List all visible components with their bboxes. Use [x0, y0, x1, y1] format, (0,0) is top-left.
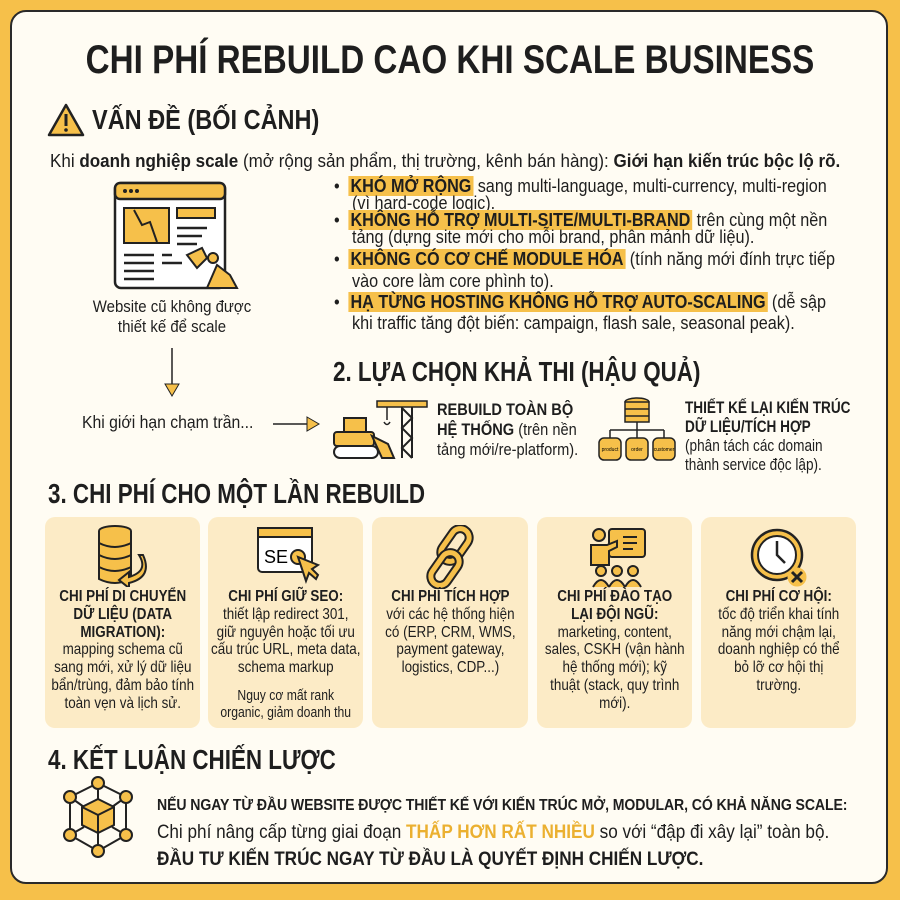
icon: warning: [48, 104, 84, 136]
bullet 4: [334, 291, 826, 333]
card: opportunity: CHI PHÍ CƠ HỘI:: [725, 588, 832, 605]
card: training: [537, 517, 692, 728]
card: data migration: toàn vẹn và lịch sử.: [64, 695, 181, 712]
option 2 text: THIẾT KẾ LẠI KIẾN TRÚC: [685, 398, 850, 417]
heading: section 4: 4. KẾT LUẬN CHIẾN LƯỢC: [48, 744, 336, 775]
heading: section 3: 3. CHI PHÍ CHO MỘT LẦN REBUILD: [48, 478, 425, 509]
option 2 text: thành service độc lập).: [685, 455, 822, 474]
conclusion text: ĐẦU TƯ KIẾN TRÚC NGAY TỪ ĐẦU LÀ QUYẾT ĐỊNH CHIẾN LƯỢC.: [157, 848, 703, 870]
icon: broken website: [114, 182, 239, 290]
caption: website: Website cũ không được: [93, 297, 251, 316]
caption: website: [92, 297, 251, 336]
icon: clock with x: [750, 528, 806, 586]
card: SEO: [208, 517, 363, 728]
option 2 text: (phân tách các domain: [685, 436, 823, 455]
heading: van de: VẤN ĐỀ (BỐI CẢNH): [92, 104, 319, 135]
card: data migration: sang mới, xử lý dữ liệu: [54, 659, 191, 676]
option 2 text: [685, 398, 850, 474]
arrow down: [164, 348, 180, 397]
card: training: LẠI ĐỘI NGŨ:: [571, 606, 658, 623]
arrow right: [273, 416, 320, 432]
card: data migration: mapping schema cũ: [62, 641, 183, 658]
conclusion text: Chi phí nâng cấp từng giai đoạn THẤP HƠN RẤT NHIỀU so với “đập đi xây lại” toàn bộ.: [157, 821, 829, 843]
icon: presenter: [590, 528, 646, 588]
icon: database split: order: [631, 447, 643, 453]
card: SEO: cấu trúc URL, meta data,: [211, 641, 360, 658]
card: training: CHI PHÍ ĐÀO TẠO: [557, 588, 672, 605]
card: integration: CHI PHÍ TÍCH HỢP: [391, 588, 509, 605]
option 1 text: HỆ THỐNG (trên nền: [437, 420, 577, 439]
bullet list: [334, 175, 835, 333]
icon: database split: [598, 397, 676, 461]
card: SEO: giữ nguyên hoặc tối ưu: [216, 624, 355, 641]
card: integration: payment gateway,: [396, 641, 504, 658]
card: data migration: DỮ LIỆU (DATA: [73, 606, 172, 623]
card: SEO: thiết lập redirect 301,: [223, 606, 348, 623]
caption: website: thiết kế để scale: [118, 317, 226, 336]
option 1 text: REBUILD TOÀN BỘ: [437, 400, 573, 419]
option 2 text: DỮ LIỆU/TÍCH HỢP: [685, 417, 811, 436]
bullet 4: • HẠ TỪNG HOSTING KHÔNG HỖ TRỢ AUTO-SCALING (dễ sập: [334, 292, 826, 312]
conclusion text: [157, 796, 847, 870]
icon: bulldozer and crane: [333, 400, 428, 459]
option 1 text: tảng mới/re-platform).: [437, 440, 578, 459]
bullet 1: (vì hard-code logic).: [352, 193, 495, 213]
card: opportunity: [701, 517, 856, 728]
intro text: Khi doanh nghiệp scale (mở rộng sản phẩm, thị trường, kênh bán hàng): Giới hạn kiến trúc bộc lộ rõ.: [50, 150, 840, 171]
card: opportunity: doanh nghiệp có thể: [718, 641, 839, 658]
card: integration: [372, 517, 528, 728]
card: data migration: CHI PHÍ DI CHUYỂN: [59, 588, 186, 605]
text: limit reached: Khi giới hạn chạm trần...: [82, 412, 253, 432]
card: data migration: [45, 517, 200, 728]
icon: database migrate: [98, 525, 147, 587]
card: opportunity: bỏ lỡ cơ hội thị: [734, 659, 823, 676]
card: opportunity: tốc độ triển khai tính: [718, 606, 839, 623]
card: training: sales, CSKH (vận hành: [545, 641, 684, 658]
card: SEO: organic, giảm doanh thu: [220, 705, 351, 721]
card: training: hệ thống mới); kỹ: [562, 659, 667, 676]
card: opportunity: năng mới chậm lại,: [721, 624, 836, 641]
bullet 2: • KHÔNG HỖ TRỢ MULTI-SITE/MULTI-BRAND trên cùng một nền: [334, 210, 827, 230]
icon: chain link: [426, 525, 474, 589]
card: training: thuật (stack, quy trình: [550, 677, 679, 694]
card: SEO: CHI PHÍ GIỮ SEO:: [228, 588, 343, 605]
card: opportunity: trường.: [756, 677, 801, 694]
icon: database split: product: [602, 447, 619, 453]
card: SEO: Nguy cơ mất rank: [237, 688, 334, 704]
card: SEO: schema markup: [238, 659, 333, 676]
bullet 1: [334, 175, 827, 213]
title: CHI PHÍ REBUILD CAO KHI SCALE BUSINESS: [86, 38, 814, 82]
card: data migration: MIGRATION):: [80, 624, 165, 641]
bullet 2: tảng (dựng site mới cho mỗi brand, phân mảnh dữ liệu).: [352, 227, 754, 247]
option 1 text: [437, 400, 578, 459]
card: integration: logistics, CDP...): [401, 659, 499, 676]
icon: modular cube: [63, 776, 133, 858]
bullet 4: khi traffic tăng đột biến: campaign, flash sale, seasonal peak).: [352, 313, 795, 333]
card: integration: có (ERP, CRM, WMS,: [385, 624, 515, 641]
bullet 3: • KHÔNG CÓ CƠ CHẾ MODULE HÓA (tính năng mới đính trực tiếp: [334, 249, 835, 269]
card: training: mới).: [599, 695, 630, 712]
heading: section 2: 2. LỰA CHỌN KHẢ THI (HẬU QUẢ): [333, 356, 700, 387]
bullet 2: [334, 209, 827, 247]
card: integration: với các hệ thống hiện: [386, 606, 514, 623]
bullet 1: • KHÓ MỞ RỘNG sang multi-language, multi-currency, multi-region: [334, 176, 827, 196]
icon: database split: customer: [654, 447, 675, 453]
conclusion text: NẾU NGAY TỪ ĐẦU WEBSITE ĐƯỢC THIẾT KẾ VỚI KIẾN TRÚC MỞ, MODULAR, CÓ KHẢ NĂNG SCALE:: [157, 797, 847, 814]
card: data migration: bẩn/trùng, đảm bảo tính: [51, 677, 194, 694]
bullet 3: vào core làm core phình to).: [352, 271, 554, 291]
icon: SEO browser: SE: [264, 547, 288, 567]
icon: SEO browser: [257, 527, 320, 584]
bullet 3: [334, 248, 835, 291]
card: training: marketing, content,: [557, 624, 672, 641]
